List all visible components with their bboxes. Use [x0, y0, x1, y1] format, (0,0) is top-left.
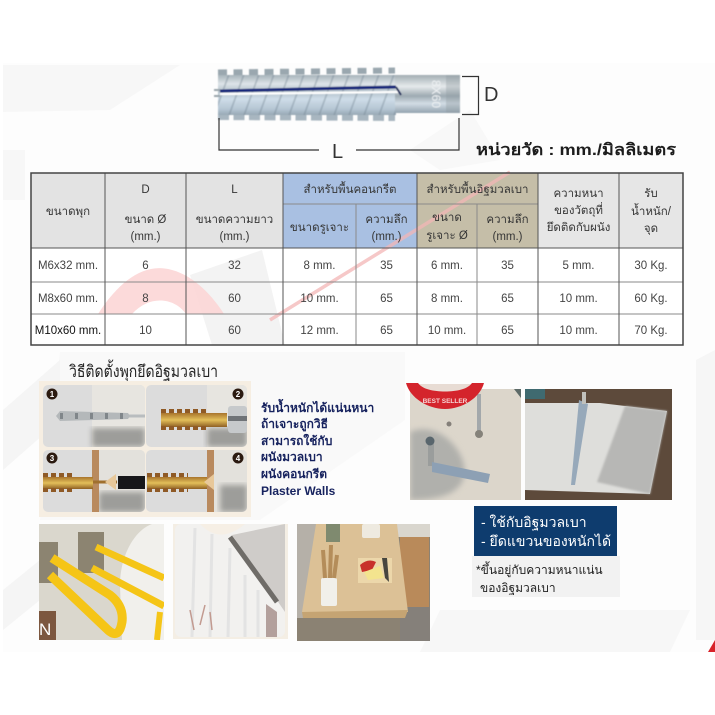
header labels: รูเจาะ Ø — [426, 230, 468, 242]
header labels: ขนาดความยาว — [196, 214, 273, 226]
badge: best seller — [406, 383, 484, 409]
row M10x60: 70 Kg. — [634, 325, 668, 337]
header labels — [46, 181, 672, 243]
row M8x60: 8 — [142, 293, 149, 305]
row M6x32: 6 mm. — [431, 260, 463, 272]
dimension L — [219, 118, 459, 163]
benefits text — [261, 398, 374, 498]
specification table — [31, 172, 683, 345]
row M6x32: 5 mm. — [563, 260, 594, 272]
row M10x60: 10 mm. — [428, 325, 466, 337]
row M10x60: 10 — [139, 325, 152, 337]
step 3 — [43, 450, 145, 512]
benefits text: ผนังมวลเบา — [261, 450, 323, 464]
row M10x60 — [35, 325, 668, 337]
header labels: จุด — [644, 223, 658, 235]
row M8x60 — [38, 293, 668, 305]
row M6x32: 8 mm. — [304, 260, 335, 272]
header labels: (mm.) — [130, 231, 161, 243]
row M6x32: 35 — [380, 260, 393, 272]
step 4 — [146, 450, 247, 512]
step 1: 1 — [50, 390, 55, 399]
dimension D — [462, 76, 498, 114]
step 2 — [146, 385, 247, 447]
dimension L: L — [332, 141, 343, 163]
header labels: ความหนา — [553, 188, 604, 200]
step 3: 3 — [50, 454, 55, 463]
header labels: ขนาดพุก — [46, 206, 90, 218]
header labels: ยึดติดกับผนัง — [546, 221, 610, 234]
row M8x60: 65 — [380, 293, 393, 305]
row M8x60: 8 mm. — [431, 293, 463, 305]
row M10x60: 10 mm. — [559, 325, 598, 337]
installation heading: วิธีติดตั้งพุกยึดอิฐมวลเบา — [68, 359, 218, 382]
benefits text: รับน้ำหนักได้แน่นหนา — [261, 398, 374, 415]
benefits text: สามารถใช้กับ — [261, 433, 332, 448]
step 4: 4 — [236, 454, 241, 463]
header labels: น้ำหนัก/ — [631, 203, 672, 218]
header labels: สำหรับพื้นอิฐมวลเบา — [426, 181, 529, 196]
row M10x60: 12 mm. — [300, 325, 339, 337]
row M8x60: 60 — [228, 293, 241, 305]
unit label: หน่วยวัด : mm./มิลลิเมตร — [476, 141, 676, 159]
note: ของอิฐมวลเบา — [480, 581, 556, 595]
photo: anchor in block cross-section — [525, 389, 672, 500]
photo: curtain — [173, 524, 288, 639]
step 1 — [43, 385, 145, 447]
row M10x60: M10x60 mm. — [35, 325, 101, 337]
benefits text: ผนังคอนกรีต — [261, 467, 327, 481]
row M6x32: M6x32 mm. — [38, 260, 98, 272]
header labels: L — [231, 184, 238, 196]
callout: usage: - ใช้กับอิฐมวลเบา — [481, 514, 587, 531]
photo: yellow grab rails: N — [39, 620, 51, 639]
header labels: (mm.) — [219, 231, 250, 243]
header labels: ความลึก — [486, 213, 529, 226]
row M6x32 — [38, 260, 668, 272]
benefits text: Plaster Walls — [261, 484, 336, 498]
callout: usage: - ยึดแขวนของหนักได้ — [481, 533, 611, 549]
row M10x60: 60 — [228, 325, 241, 337]
benefits text: ถ้าเจาะถูกวิธี — [261, 417, 328, 432]
row M10x60: 65 — [501, 325, 514, 337]
header labels: D — [141, 184, 150, 196]
row M8x60: 10 mm. — [300, 293, 339, 305]
header fills — [31, 173, 683, 248]
row M6x32: 35 — [501, 260, 514, 272]
row M8x60: 10 mm. — [559, 293, 598, 305]
table grid — [31, 173, 683, 345]
header labels: (mm.) — [492, 231, 523, 243]
callout: usage — [474, 506, 617, 556]
header labels: (mm.) — [371, 231, 402, 243]
panel: installation steps — [39, 381, 251, 517]
row M6x32: 6 — [142, 260, 149, 272]
note — [472, 556, 620, 597]
photo: wall shelf — [297, 524, 430, 641]
row M8x60: M8x60 mm. — [38, 293, 98, 305]
header labels: ความลึก — [365, 213, 408, 226]
step 2: 2 — [236, 390, 241, 399]
note: *ขึ้นอยู่กับความหนาแน่น — [476, 561, 603, 578]
row M6x32: 30 Kg. — [634, 260, 668, 272]
row M6x32: 32 — [228, 260, 241, 272]
photo: yellow grab rails — [39, 524, 164, 640]
dimension D: D — [484, 84, 498, 106]
header labels: ขนาด — [432, 212, 462, 224]
header labels: ของวัตถุที่ — [554, 202, 603, 217]
row M10x60: 65 — [380, 325, 393, 337]
header labels: ขนาด Ø — [125, 214, 166, 226]
photo: anchors in aerated block — [410, 389, 521, 500]
row M8x60: 60 Kg. — [634, 293, 668, 305]
header labels: ขนาดรูเจาะ — [290, 222, 349, 234]
row M8x60: 65 — [501, 293, 514, 305]
header labels: สำหรับพื้นคอนกรีต — [303, 181, 397, 196]
watermark streak — [98, 172, 510, 345]
header labels: รับ — [644, 188, 658, 200]
badge: best seller: BEST SELLER — [423, 398, 468, 405]
product image: wall anchor: 8X60 — [429, 80, 443, 108]
product image: wall anchor — [214, 70, 460, 118]
